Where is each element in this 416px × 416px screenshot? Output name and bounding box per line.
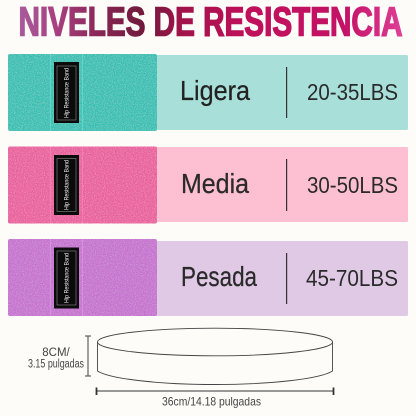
weight range: 30-50LBS <box>307 172 398 198</box>
weight range: 45-70LBS <box>306 265 398 291</box>
panel: Media <box>8 146 408 224</box>
panel: Ligera <box>8 54 408 131</box>
panel: Pesada <box>8 239 408 316</box>
divider <box>286 253 287 304</box>
width dimension arrow <box>96 388 334 395</box>
level name: Ligera <box>180 75 250 106</box>
band outline diagram <box>98 328 332 384</box>
divider <box>286 67 287 118</box>
level background <box>150 241 408 316</box>
band: purple <box>8 239 157 316</box>
band: pink <box>8 146 157 224</box>
level name: Pesada <box>181 261 257 292</box>
width label: 36cm/14.18 pulgadas <box>162 394 261 408</box>
band: turquoise: Hip Resistance Band <box>64 68 70 118</box>
level background <box>150 55 408 130</box>
divider <box>286 159 287 211</box>
height label: 8CM/ <box>42 347 71 359</box>
height label <box>28 347 84 370</box>
band: purple: Hip Resistance Band <box>64 253 70 303</box>
weight range: 20-35LBS <box>307 79 398 105</box>
level name: Media <box>181 168 249 199</box>
height dimension arrow <box>85 336 91 376</box>
level background <box>150 147 408 222</box>
band: turquoise <box>8 54 157 131</box>
height label: 3.15 pulgadas <box>28 358 84 370</box>
band: pink: Hip Resistance Band <box>64 160 70 210</box>
